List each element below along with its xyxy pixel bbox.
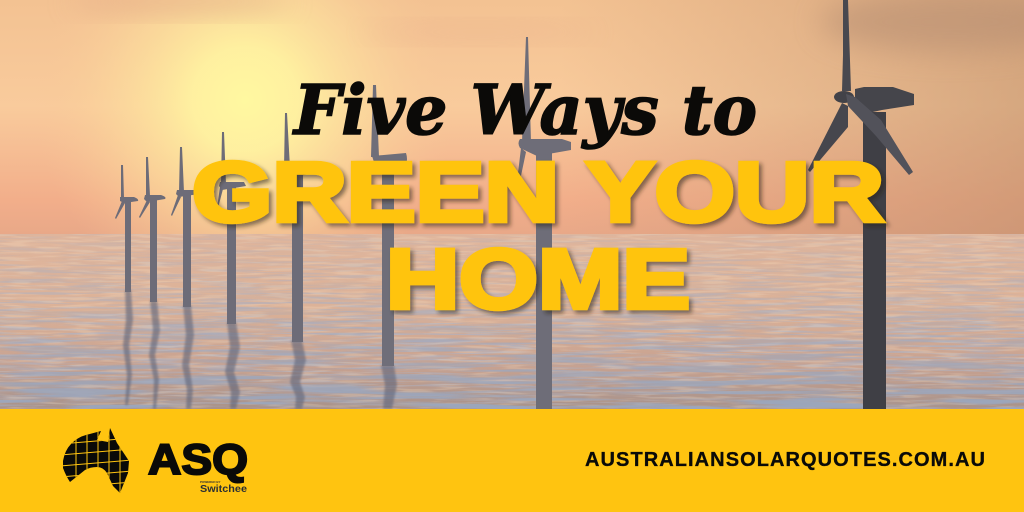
turbine reflections	[123, 290, 397, 409]
background: sunset sky	[0, 0, 1024, 236]
wind turbine 3	[171, 147, 199, 307]
title line 3: HOME	[386, 232, 690, 326]
footer band	[0, 409, 1024, 512]
logo wordmark: ASQ	[148, 436, 248, 484]
wind turbine 5	[283, 113, 319, 342]
background: sea with ripples	[0, 234, 1024, 409]
icon: Australia solar panel logo	[63, 428, 129, 493]
powered by label: POWERED BY	[200, 480, 221, 484]
wind turbine 6	[371, 85, 407, 366]
wind turbine 4	[217, 132, 246, 324]
wind turbine 7	[516, 37, 571, 409]
wind turbine 2	[139, 157, 166, 302]
wind turbine 1	[115, 165, 138, 292]
title line 1: Five Ways to	[292, 71, 757, 151]
wind turbine 8: foreground	[808, 0, 914, 409]
Switchee brand: Switchee	[200, 483, 247, 495]
title line 2: GREEN YOUR	[192, 145, 884, 239]
website address: AUSTRALIANSOLARQUOTES.COM.AU	[585, 449, 985, 471]
